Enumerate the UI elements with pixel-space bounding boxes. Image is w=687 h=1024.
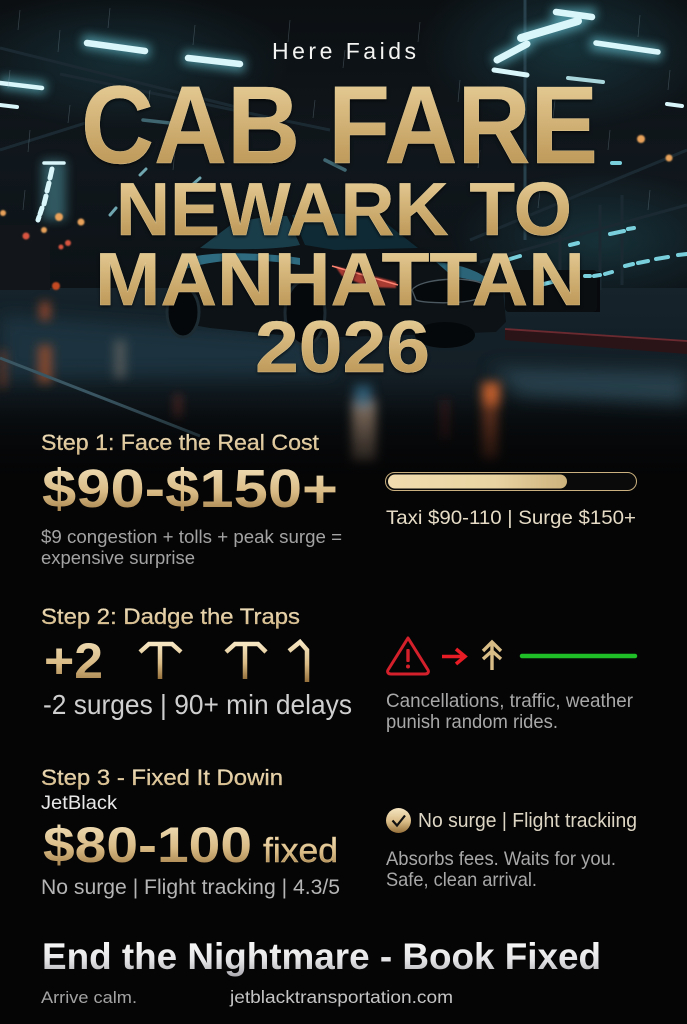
kicker text: Here Faids [272, 38, 416, 64]
call to action headline: End the Nightmare - Book Fixed [42, 936, 601, 977]
bar fill [388, 474, 567, 488]
icon: T-shaped surge markers [140, 642, 307, 682]
bar label: Taxi $90-110 | Surge $150+ [386, 507, 636, 529]
title [81, 64, 598, 388]
price range: $90-$150+ [42, 459, 338, 519]
benefit description: Absorbs fees. Waits for you. [386, 848, 616, 870]
title line: 2026: 2026 [255, 307, 430, 388]
fixed price: $80-100 [43, 817, 252, 873]
background photo: rainy airport road with black car [0, 0, 687, 480]
fixed label: fixed [263, 832, 338, 870]
title line: cab fare: CAB FARE [81, 64, 598, 187]
wet road reflections [0, 302, 687, 462]
surge and delay text: -2 surges | 90+ min delays [43, 689, 352, 720]
panel: step 3 fixed price [41, 765, 340, 899]
panel: fixed benefits [386, 808, 637, 891]
title line: manhattan: MANHATTAN [95, 237, 585, 321]
benefit labels: No surge | Flight trackiing [418, 810, 637, 832]
feature list: No surge | Flight tracking | 4.3/5 [41, 876, 340, 899]
curb [505, 329, 687, 354]
brand name: JetBlack [41, 793, 118, 814]
car [167, 212, 506, 348]
heading: step 2: Step 2: Dadge the Traps [41, 604, 300, 629]
description: expensive surprise [41, 547, 195, 568]
icon: red arrow [442, 649, 465, 664]
icon: gold up arrow [483, 642, 501, 670]
icon: check badge [386, 808, 411, 833]
warning description: Cancellations, traffic, weather [386, 690, 633, 712]
heading: step 3: Step 3 - Fixed It Dowin [41, 765, 283, 790]
icon: warning triangle [388, 638, 428, 674]
description: $9 congestion + tolls + peak surge = [41, 526, 342, 547]
panel: step 2 traps [41, 604, 352, 720]
footer note: Arrive calm. [41, 988, 137, 1007]
heading: step 1: Step 1: Face the Real Cost [41, 430, 320, 455]
title line: newark to: NEWARK TO [116, 167, 572, 251]
lane line [0, 358, 200, 436]
bar track [386, 472, 636, 490]
panel: fare progress bar [386, 472, 636, 529]
panel: step 1 cost [41, 430, 347, 568]
green line [522, 654, 635, 658]
benefit description: Safe, clean arrival. [386, 869, 537, 891]
panel: warning flow [386, 638, 638, 733]
surge count: +2 [44, 633, 103, 689]
footer url: jetblacktransportation.com [229, 987, 453, 1007]
warning description: punish random rides. [386, 711, 558, 733]
